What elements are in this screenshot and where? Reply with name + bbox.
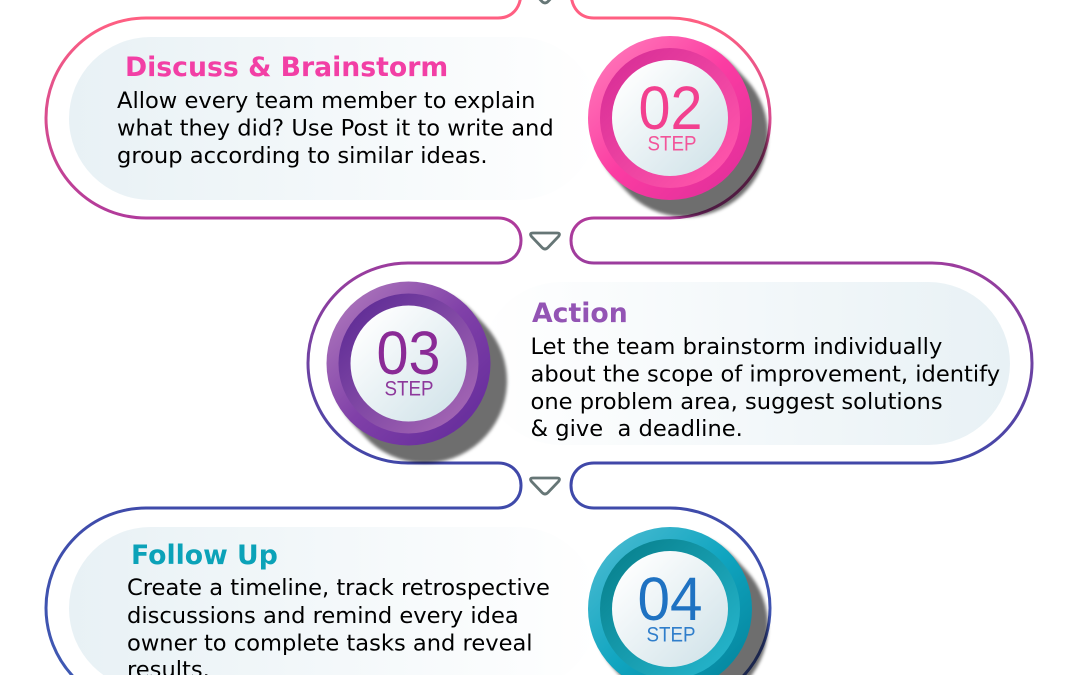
panel: step 2 background bbox=[69, 37, 599, 200]
panel: step 3 background bbox=[480, 282, 1010, 445]
text block: step 3 description: about the scope of improvement, identify bbox=[530, 362, 1000, 388]
badge: step 02: STEP bbox=[648, 132, 696, 156]
text block: step 2 description: group according to similar ideas. bbox=[117, 143, 488, 169]
text block: step 3 description: one problem area, suggest solutions bbox=[530, 389, 943, 415]
badge: step 03 bbox=[326, 282, 490, 446]
badge: step 04: 04 bbox=[638, 565, 702, 633]
badge: step 03: 03 bbox=[376, 319, 440, 387]
text block: step 3 description: Let the team brainstorm individually bbox=[530, 334, 942, 360]
text block: step 3 description: & give a deadline. bbox=[530, 416, 743, 442]
heading: Follow Up: Follow Up bbox=[131, 540, 278, 571]
text block: step 2 description: Allow every team member to explain bbox=[117, 88, 535, 114]
heading: Discuss & Brainstorm: Discuss & Brainstorm bbox=[125, 52, 448, 83]
connector line: left side bbox=[46, 0, 521, 675]
text block: step 4 description: Create a timeline, track retrospective bbox=[127, 575, 550, 601]
arrow: into step 3 bbox=[531, 233, 559, 249]
badge: step 02: 02 bbox=[638, 74, 702, 142]
text block: step 2 description bbox=[117, 88, 554, 169]
text block: step 4 description: discussions and remind every idea bbox=[127, 603, 519, 629]
text block: step 3 description bbox=[530, 334, 1000, 442]
heading: Action: Action bbox=[532, 298, 628, 329]
panel: step 4 background bbox=[69, 527, 599, 675]
text block: step 4 description: owner to complete tasks and reveal bbox=[127, 630, 533, 656]
badge: step 04 bbox=[588, 527, 752, 675]
badge: step 03: STEP bbox=[384, 376, 434, 400]
badge: step 02 bbox=[588, 36, 752, 200]
text block: step 4 description bbox=[127, 575, 550, 675]
arrow: into step 2 bbox=[531, 0, 559, 3]
badge: step 04: STEP bbox=[646, 622, 696, 646]
text block: step 2 description: what they did? Use Post it to write and bbox=[117, 116, 554, 142]
connector line: right side bbox=[571, 0, 1032, 675]
arrow: into step 4 bbox=[531, 478, 559, 494]
